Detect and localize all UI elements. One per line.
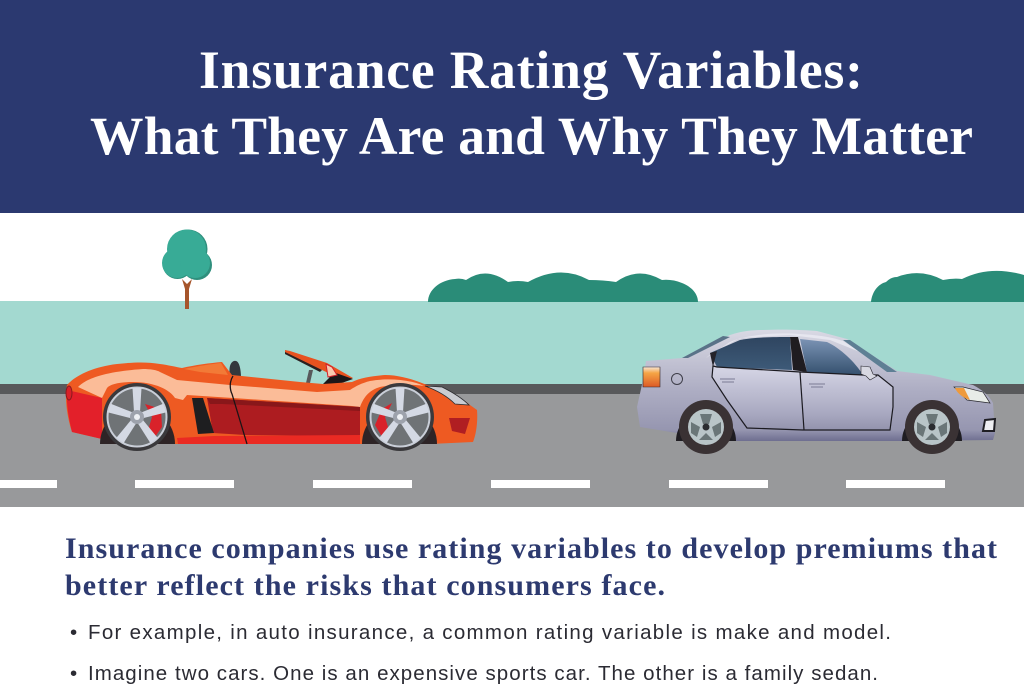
tail light bbox=[643, 367, 660, 387]
title: What They Are and Why They Matter bbox=[90, 106, 973, 166]
sedan car bbox=[637, 330, 995, 454]
doors bbox=[712, 366, 893, 430]
b pillar bbox=[790, 337, 807, 372]
door line bbox=[230, 376, 247, 444]
side window rear bbox=[710, 337, 792, 370]
tail light bbox=[66, 386, 72, 400]
bushes middle bbox=[428, 272, 698, 302]
wheel rear bbox=[100, 383, 175, 451]
road surface bbox=[0, 394, 1024, 507]
seat headrest bbox=[229, 361, 241, 378]
bullet list bbox=[70, 621, 891, 685]
bullet list: For example, in auto insurance, a common rating variable is make and model. bbox=[88, 621, 891, 644]
road scene bbox=[0, 230, 1024, 507]
side sill bbox=[177, 435, 360, 444]
bushes right bbox=[871, 271, 1024, 302]
teal background band bbox=[0, 301, 1024, 384]
bullet list: • bbox=[70, 662, 77, 685]
intro heading: Insurance companies use rating variables to develop premiums that bbox=[65, 532, 997, 565]
title: Insurance Rating Variables: bbox=[199, 40, 863, 100]
body bbox=[637, 330, 995, 441]
side vent bbox=[192, 398, 214, 434]
intro heading bbox=[65, 532, 997, 602]
side panel dark red bbox=[207, 398, 360, 436]
body bbox=[66, 362, 477, 444]
road kerb bbox=[0, 384, 1024, 394]
windscreen bbox=[843, 340, 897, 372]
headlight bbox=[425, 386, 469, 405]
side window front bbox=[800, 339, 863, 375]
door handles bbox=[720, 379, 825, 387]
red rear bbox=[67, 390, 102, 439]
front vent bbox=[449, 418, 470, 434]
tree bbox=[162, 230, 212, 309]
rear window bbox=[682, 336, 730, 358]
wheel front bbox=[362, 383, 437, 451]
wheel front bbox=[902, 400, 962, 454]
sports car bbox=[66, 350, 477, 451]
fuel cap bbox=[672, 374, 682, 384]
title bbox=[90, 40, 973, 166]
head light bbox=[954, 387, 990, 403]
intro heading: better reflect the risks that consumers face. bbox=[65, 569, 665, 602]
wing mirror bbox=[861, 366, 877, 380]
bullet list: • bbox=[70, 621, 77, 644]
c pillar dark bbox=[710, 351, 717, 367]
header banner bbox=[0, 0, 1024, 213]
fog lamp bbox=[983, 419, 995, 431]
roof highlight bbox=[706, 333, 860, 358]
highlight stripe bbox=[78, 369, 424, 407]
windscreen frame bbox=[285, 350, 353, 381]
road lane markings bbox=[0, 480, 945, 488]
wheel rear bbox=[676, 400, 736, 454]
hood scoop bbox=[184, 363, 228, 375]
bullet list: Imagine two cars. One is an expensive sports car. The other is a family sedan. bbox=[88, 662, 878, 685]
